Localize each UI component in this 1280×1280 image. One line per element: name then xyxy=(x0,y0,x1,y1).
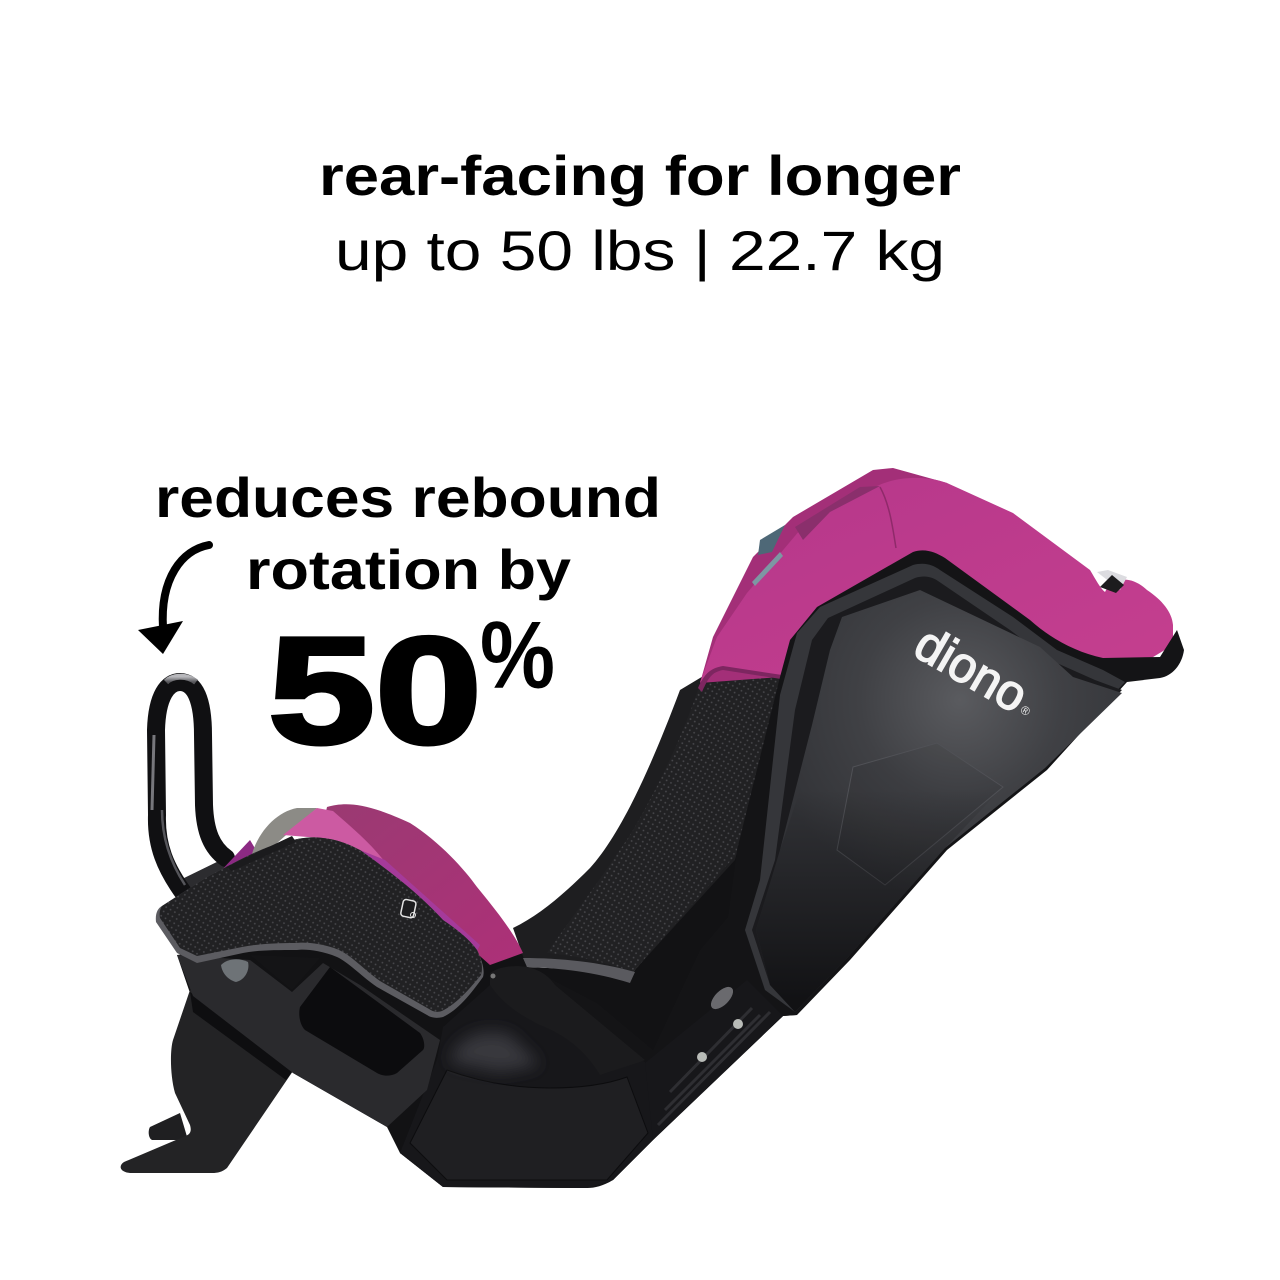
car seat illustration xyxy=(121,468,1184,1188)
shell and base outer body xyxy=(400,550,1184,1188)
leg cushion fabric xyxy=(156,837,484,1018)
shell lower shading xyxy=(756,790,1000,1012)
callout: reduces rebound rotation by 50%: 50 xyxy=(268,606,482,776)
callout: reduces rebound rotation by 50%: reduces rebound xyxy=(155,466,661,529)
hidden dark seam xyxy=(795,486,880,540)
title: rear-facing for longer: rear-facing for longer xyxy=(319,144,961,207)
headrest opening xyxy=(1097,570,1127,593)
purple sliver xyxy=(360,850,480,955)
center pivot block xyxy=(490,966,645,1075)
handle mount xyxy=(180,858,240,905)
grey release button xyxy=(221,959,248,982)
mechanism gap xyxy=(250,955,320,990)
back cushion front pink xyxy=(700,478,1173,682)
shell center panel xyxy=(756,590,1122,1012)
base panel xyxy=(410,1070,648,1180)
subtitle: weight limit: up to 50 lbs | 22.7 kg xyxy=(335,219,945,282)
grey support xyxy=(250,808,317,862)
backing silhouette xyxy=(177,850,797,1188)
grip body xyxy=(177,955,440,1127)
shell dark inset xyxy=(752,577,1122,1012)
rebound bar handle xyxy=(152,677,226,895)
dark pink leg cushion xyxy=(320,804,523,965)
load leg xyxy=(121,990,295,1173)
screw dot xyxy=(490,974,496,978)
logo: diono: diono xyxy=(906,615,1037,724)
logo: diono: ® xyxy=(1018,703,1033,719)
black wedge xyxy=(226,836,296,871)
base highlight xyxy=(450,1032,540,1072)
seat back fabric xyxy=(513,675,785,983)
label tag xyxy=(752,525,785,586)
leg rest toe xyxy=(149,1113,188,1140)
callout: reduces rebound rotation by 50%: rotation by xyxy=(246,538,571,601)
tray opening xyxy=(299,967,424,1076)
light pink leg cushion xyxy=(283,808,385,862)
callout: reduces rebound rotation by 50%: % xyxy=(480,602,555,709)
cushion lower edge xyxy=(698,666,782,692)
center base body xyxy=(400,985,653,1188)
arrow: curved rotation arrow xyxy=(138,545,209,654)
purple trim xyxy=(217,840,262,882)
callout: reduces rebound rotation by 50% xyxy=(155,466,661,776)
leg shadow xyxy=(190,992,295,1080)
base rail xyxy=(645,980,783,1140)
embossed pentagon xyxy=(837,743,1003,885)
back cushion dark pink rear layer xyxy=(700,468,960,683)
small fabric tag icon xyxy=(400,899,417,918)
shell inner band xyxy=(745,564,1125,1012)
cushion seam xyxy=(880,487,896,548)
